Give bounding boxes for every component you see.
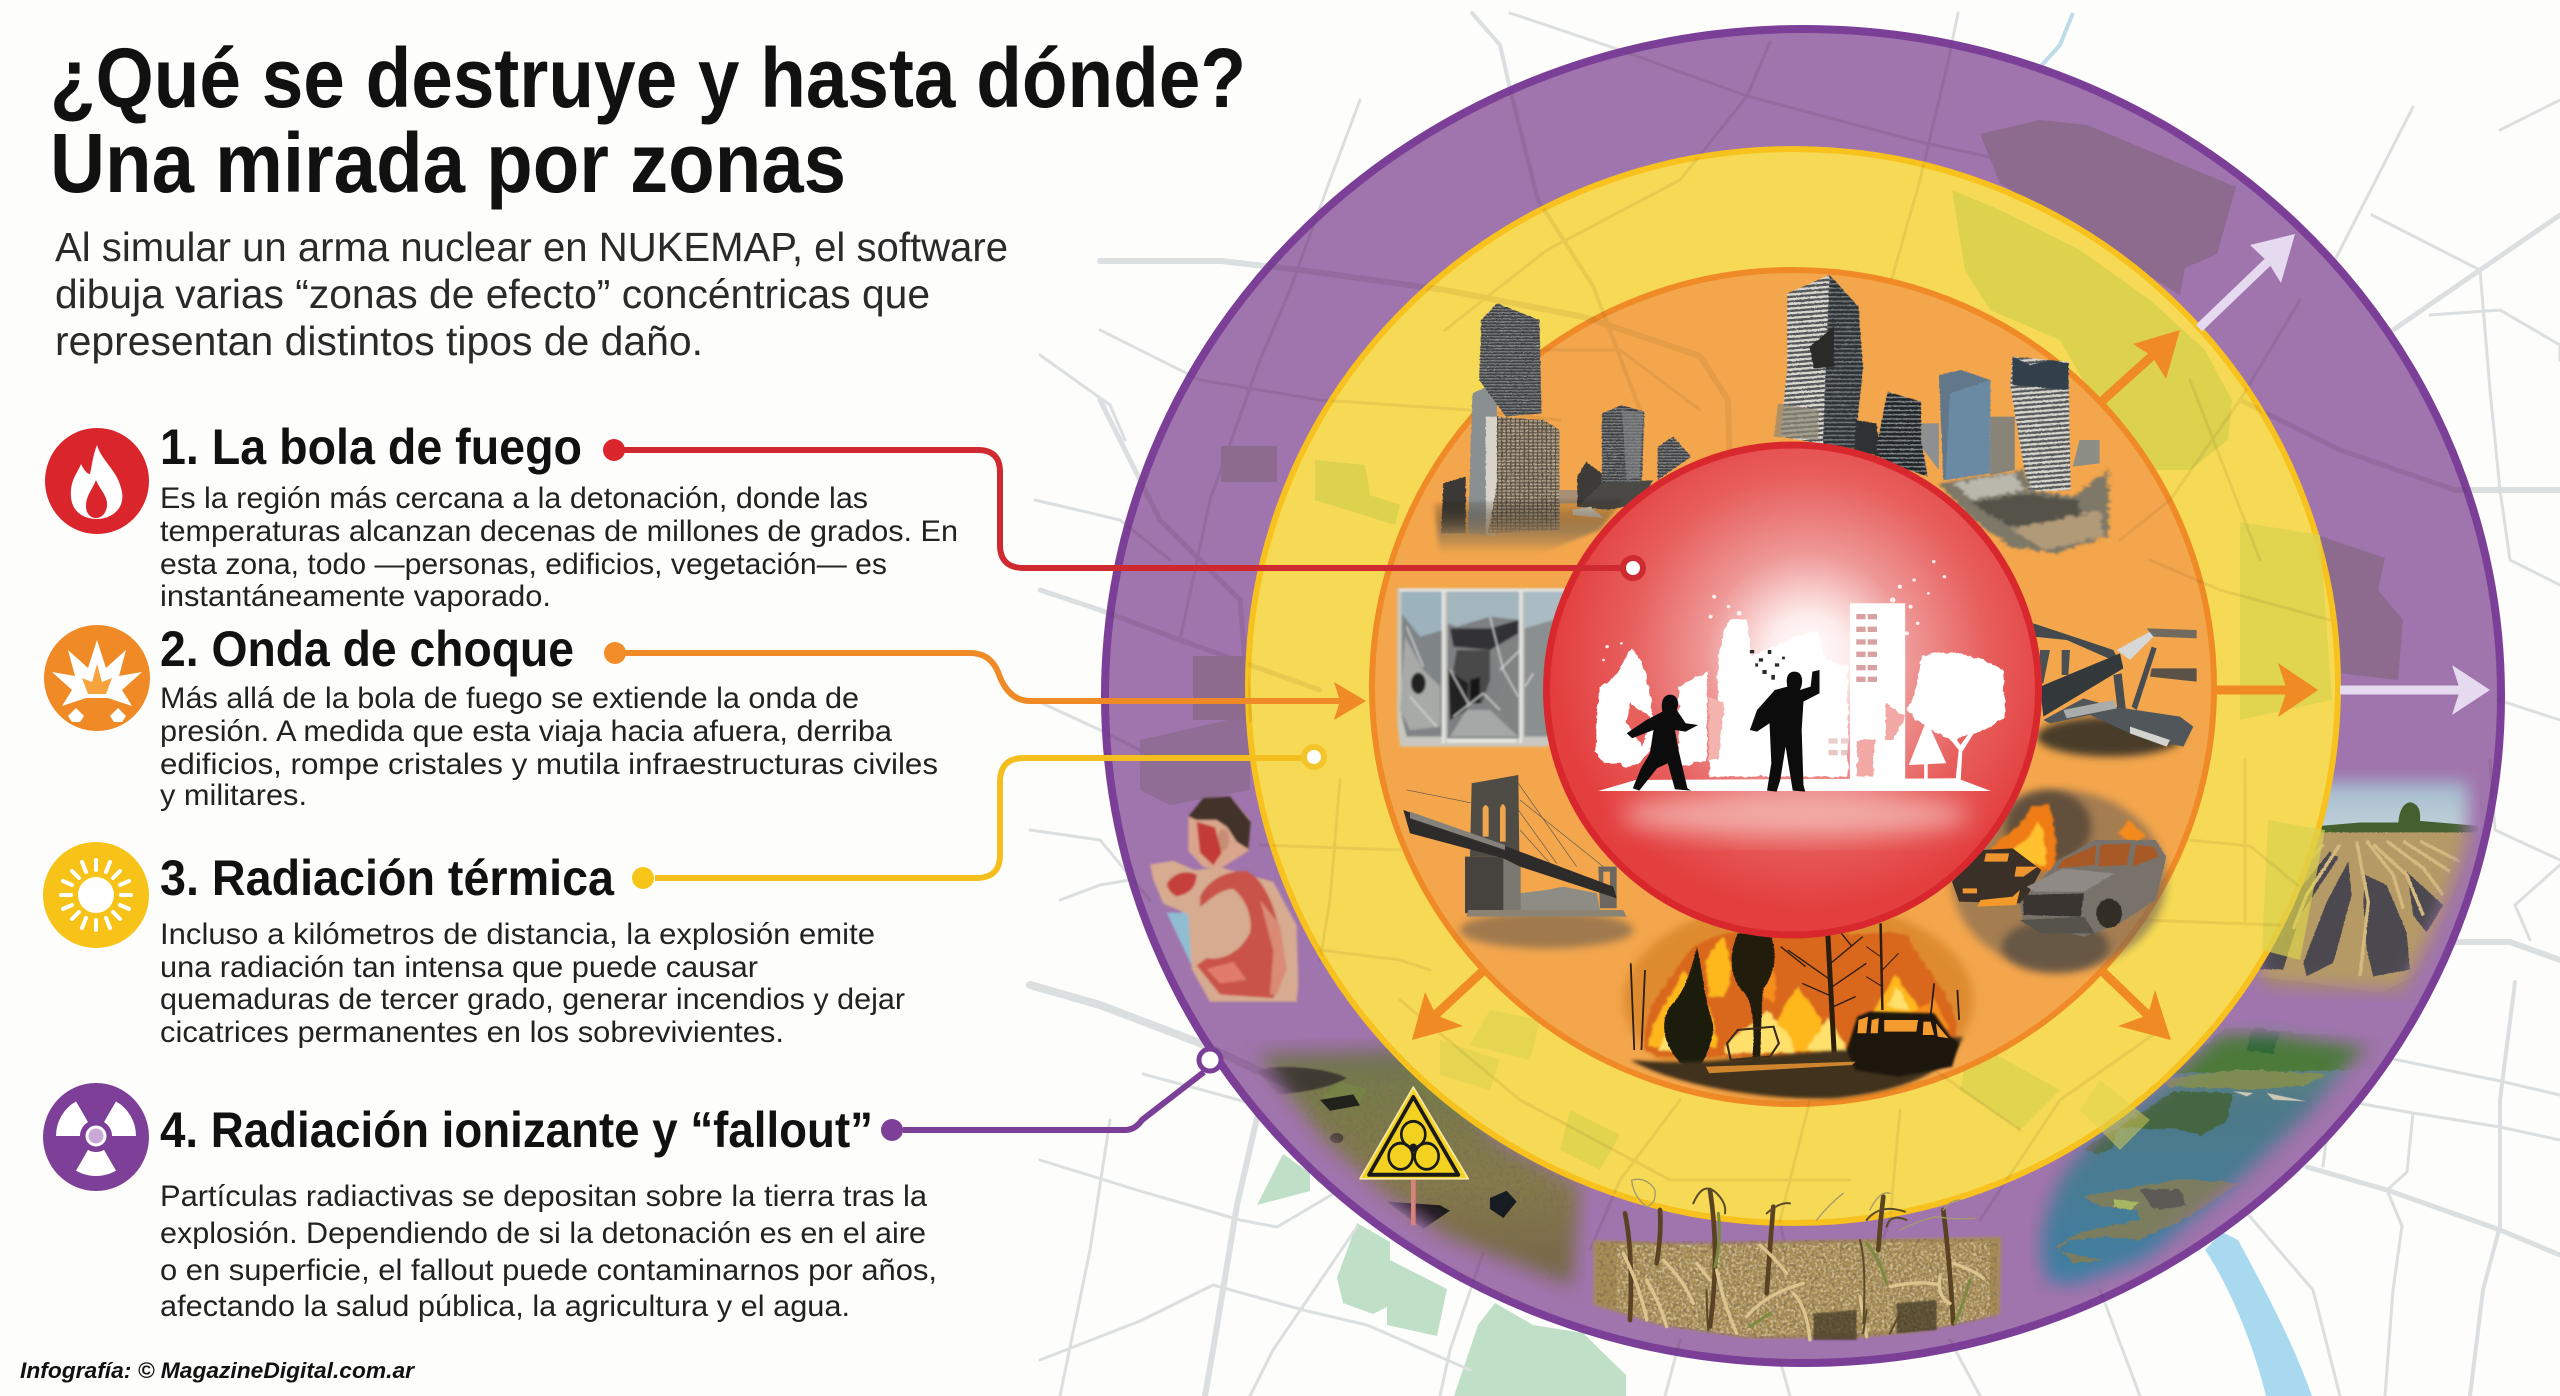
body 2 — [160, 682, 938, 812]
zone 1: fireball — [1546, 445, 2038, 935]
section 1: fireball — [45, 419, 958, 613]
zone 3: yellow ring — [1248, 149, 2338, 1223]
photo: ruined skyline right — [1774, 275, 2109, 553]
person disintegrating — [1750, 670, 1820, 792]
photo: burning cars — [1952, 790, 2166, 973]
fireball scene: silhouettes — [1596, 560, 2005, 792]
photo: polluted water — [2028, 1020, 2387, 1297]
map: parks — [1257, 1154, 1626, 1396]
heading 4: 4. Radiación ionizante y “fallout” — [160, 1102, 873, 1158]
photo: broken window — [1397, 588, 1567, 747]
connector: fireball — [603, 439, 1643, 578]
footer credit: Infografía: © MagazineDigital.com.ar — [20, 1358, 415, 1383]
body 4 — [160, 1180, 937, 1323]
map: city streets — [1030, 13, 2560, 1396]
body 3: Incluso a kilómetros de distancia, la explosión emite — [160, 918, 875, 951]
icon: explosion — [44, 625, 150, 731]
section 3: thermal radiation — [43, 842, 905, 1049]
body 2: edificios, rompe cristales y mutila infraestructuras civiles — [160, 748, 938, 781]
zone 4: map streets — [1106, 40, 2501, 1362]
connector: fallout — [881, 1049, 1221, 1141]
icon: flame — [45, 428, 149, 534]
zone 2: orange ring — [1372, 270, 2214, 1104]
title: Una mirada por zonas — [50, 116, 846, 210]
connector: shock wave — [604, 642, 1366, 720]
photo: contaminated land — [1225, 1034, 1593, 1307]
body 1: temperaturas alcanzan decenas de millones de grados. En — [160, 515, 958, 548]
body 4: afectando la salud pública, la agricultura y el agua. — [160, 1290, 850, 1323]
map: river — [2205, 1232, 2312, 1396]
title — [50, 31, 1246, 210]
intro text: Al simular un arma nuclear en NUKEMAP, el software — [55, 224, 1008, 270]
zone 3: map patches — [1315, 190, 2332, 1170]
body 4: o en superficie, el fallout puede contaminarnos por años, — [160, 1254, 937, 1287]
title: ¿Qué se destruye y hasta dónde? — [50, 31, 1246, 125]
body 2: y militares. — [160, 779, 307, 812]
body 1: Es la región más cercana a la detonación, donde las — [160, 482, 868, 515]
body 3: una radiación tan intensa que puede causar — [160, 951, 758, 984]
body 1 — [160, 482, 958, 613]
intro text: dibuja varias “zonas de efecto” concéntricas que — [55, 271, 930, 317]
section 4: ionizing radiation — [43, 1083, 937, 1323]
photo: burned person — [1150, 796, 1298, 1002]
photo: collapsed bridge — [2033, 623, 2197, 757]
intro text — [55, 224, 1008, 364]
person running — [1627, 695, 1698, 791]
connector: thermal radiation — [632, 747, 1324, 889]
photo: Brooklyn bridge — [1403, 775, 1633, 948]
icon: sun — [43, 842, 149, 948]
body 2: presión. A medida que esta viaja hacia afuera, derriba — [160, 715, 892, 748]
body 4: explosión. Dependiendo de si la detonación es en el aire — [160, 1217, 926, 1250]
zone 4: purple ring — [1105, 29, 2501, 1363]
photo: ploughed field — [2240, 770, 2480, 1003]
body 3: cicatrices permanentes en los sobrevivientes. — [160, 1016, 784, 1049]
body 4: Partículas radiactivas se depositan sobre la tierra tras la — [160, 1180, 927, 1213]
icon: biohazard sign — [1360, 1087, 1468, 1225]
arrows: shock wave expansion — [1412, 330, 2318, 1040]
body 1: esta zona, todo —personas, edificios, vegetación— es — [160, 548, 887, 581]
photo: dead corn field — [1592, 1179, 2003, 1340]
arrows: outer radiation spread — [2199, 234, 2490, 715]
intro text: representan distintos tipos de daño. — [55, 318, 703, 364]
body 1: instantáneamente vaporado. — [160, 580, 551, 613]
photo: forest fire — [1624, 900, 1973, 1100]
heading 1: 1. La bola de fuego — [160, 419, 582, 475]
body 2: Más allá de la bola de fuego se extiende la onda de — [160, 682, 859, 715]
photo: ruined skyline left — [1434, 303, 1691, 553]
heading 2: 2. Onda de choque — [160, 621, 574, 677]
zone 4: map patches — [1140, 120, 2403, 805]
body 3: quemaduras de tercer grado, generar incendios y dejar — [160, 983, 905, 1016]
zone 3 and 2: map streets — [1248, 157, 2332, 1223]
heading 3: 3. Radiación térmica — [160, 850, 615, 906]
icon: radiation — [43, 1083, 149, 1191]
body 3 — [160, 918, 905, 1049]
section 2: shock wave — [44, 621, 938, 812]
